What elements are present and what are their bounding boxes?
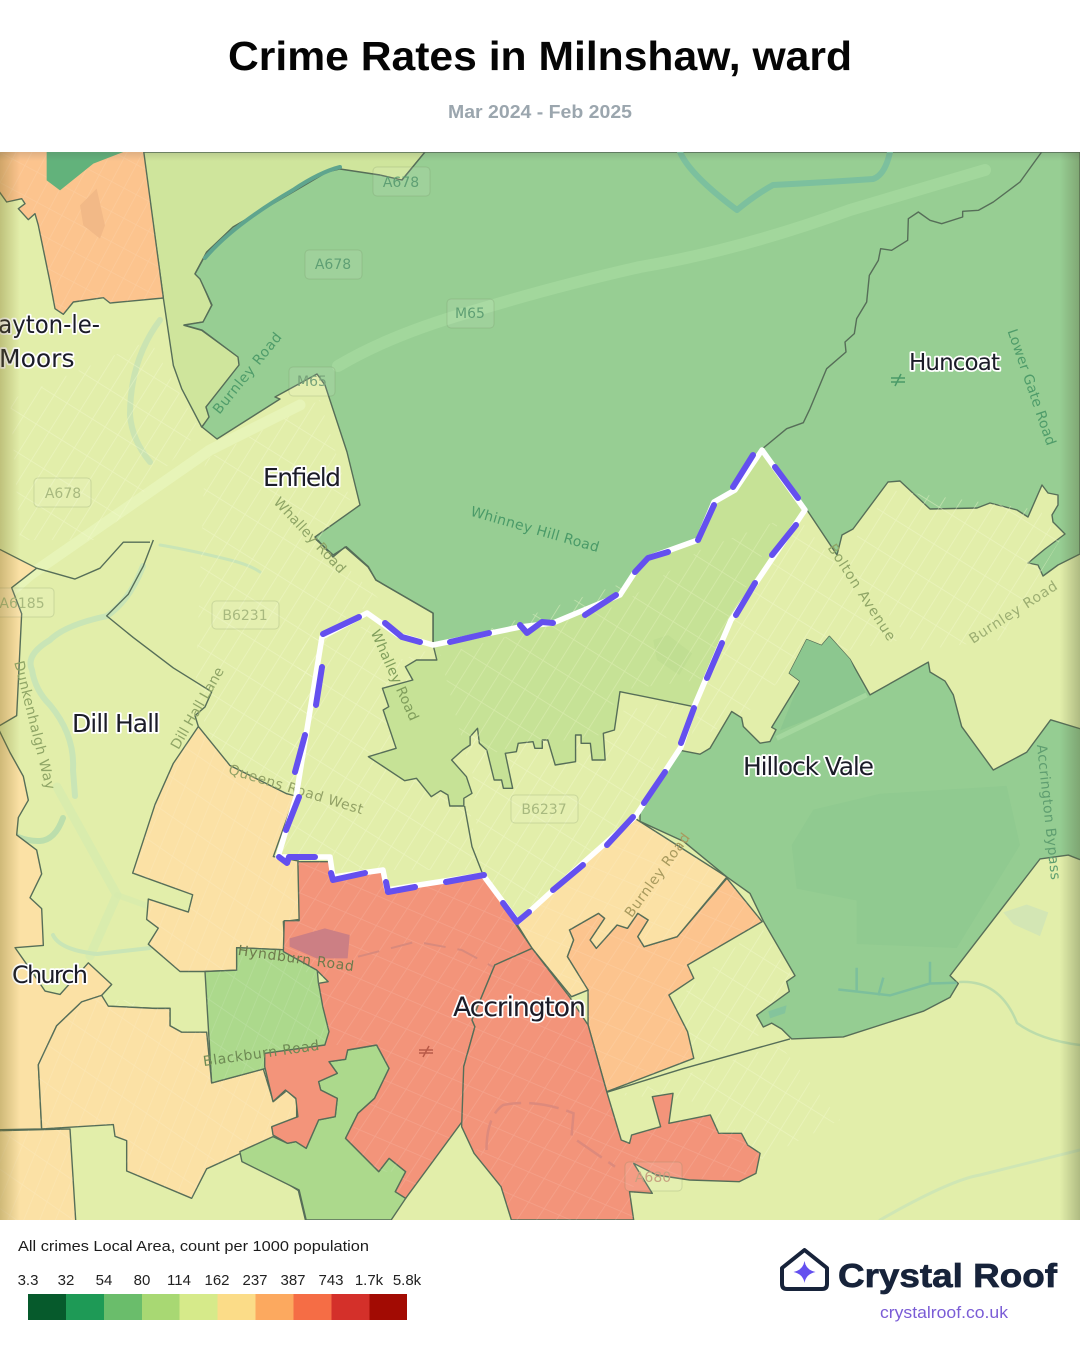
shield B6231 bbox=[212, 601, 279, 629]
map base area bbox=[0, 152, 1080, 1220]
region: orange east of Accrington bbox=[567, 878, 762, 1092]
street grid on ward inner area bbox=[440, 520, 780, 770]
place: Clayton-le-Moors bbox=[0, 310, 100, 373]
lime ward inner area bbox=[315, 450, 805, 875]
legend values: 162 bbox=[204, 1272, 230, 1289]
ward outline purple dashes bbox=[279, 455, 798, 922]
shield A680 bbox=[625, 1162, 682, 1191]
ward outline white bbox=[278, 450, 805, 922]
icon: house with star bbox=[782, 1250, 827, 1289]
boundary: between north green and Huncoat bbox=[763, 152, 1042, 448]
region: tan Burnley Road bbox=[518, 817, 727, 997]
road: Blackburn Road: Blackburn Road bbox=[202, 1038, 320, 1070]
region: Hillock Vale green bbox=[607, 636, 1080, 1092]
place labels bbox=[0, 310, 1000, 1023]
subtitle: date range: Mar 2024 - Feb 2025 bbox=[448, 101, 632, 122]
shield A678 bbox=[305, 250, 362, 279]
region: orange north-west bbox=[0, 149, 163, 314]
map edge shading bbox=[0, 152, 1080, 1220]
shield A678 north: A678 bbox=[383, 175, 419, 191]
legend values: 743 bbox=[318, 1272, 344, 1289]
place: Enfield: Enfield bbox=[263, 463, 341, 492]
shield A680: A680 bbox=[635, 1170, 671, 1186]
legend colour scale bbox=[28, 1294, 407, 1320]
legend values: 32 bbox=[58, 1272, 74, 1289]
motorway band M65 bbox=[0, 170, 1080, 956]
legend values: 114 bbox=[167, 1272, 191, 1289]
region: dark green corner bbox=[47, 152, 123, 190]
legend values: 1.7k bbox=[355, 1272, 384, 1289]
legend title: All crimes Local Area, count per 1000 population bbox=[18, 1238, 369, 1255]
website url: crystalroof.co.uk bbox=[880, 1304, 1009, 1322]
wordmark: Crystal Roof bbox=[838, 1257, 1058, 1294]
road names bbox=[10, 327, 1063, 1070]
legend values: 3.3 bbox=[18, 1272, 38, 1289]
shield M65 west bbox=[289, 367, 335, 396]
shield A6185: A6185 bbox=[0, 596, 45, 612]
road: Burnley Road south: Burnley Road bbox=[622, 830, 694, 921]
road shields bbox=[0, 167, 682, 1191]
choropleth map bbox=[0, 149, 1080, 1225]
road: Lower Gate Road: Lower Gate Road bbox=[1004, 327, 1058, 448]
icon: rail stations bbox=[419, 374, 905, 1057]
road: Accrington Bypass: Accrington Bypass bbox=[1033, 744, 1063, 881]
road: Whalley Road south: Whalley Road bbox=[367, 627, 421, 723]
road: Dill Hall Lane: Dill Hall Lane bbox=[168, 665, 228, 752]
region: red west Accrington bbox=[265, 862, 532, 1198]
shield A6185 bbox=[0, 588, 54, 617]
place: Dill Hall: Dill Hall bbox=[72, 709, 160, 738]
shield M65 bbox=[447, 299, 494, 328]
legend values: 237 bbox=[242, 1272, 268, 1289]
region: tan west, Dill Hall boundary bbox=[0, 540, 307, 1225]
road: Whalley Road north: Whalley Road bbox=[270, 494, 349, 577]
legend values: 387 bbox=[280, 1272, 306, 1289]
place: Clayton-le-Moors: Moors bbox=[0, 344, 74, 373]
logo: Crystal Roof bbox=[782, 1250, 1058, 1322]
region: light green north-west bbox=[143, 152, 425, 427]
shield M65: M65 bbox=[455, 306, 485, 322]
road: Bolton Avenue: Bolton Avenue bbox=[824, 541, 898, 644]
legend bbox=[18, 1238, 422, 1320]
road: Dunkenhalgh Way: Dunkenhalgh Way bbox=[10, 659, 58, 791]
place: Hillock Vale: Hillock Vale bbox=[743, 752, 874, 781]
road: Burnley Road east: Burnley Road bbox=[966, 578, 1061, 647]
title: Crime Rates in Milnshaw, ward bbox=[228, 33, 852, 79]
road: Burnley Road north: Burnley Road bbox=[210, 330, 285, 418]
road: Hyndburn Road: Hyndburn Road bbox=[237, 943, 355, 975]
place: Huncoat: Huncoat bbox=[909, 350, 1000, 376]
region: red east Accrington bbox=[462, 948, 760, 1220]
shield M65 west: M65 bbox=[297, 374, 327, 390]
region: green south of Accrington bbox=[240, 1045, 406, 1220]
region: large green north and Huncoat bbox=[184, 152, 1080, 643]
region: green block Blackburn Road bbox=[205, 948, 330, 1083]
shield B6237: B6237 bbox=[521, 802, 567, 818]
shield A678: A678 bbox=[315, 257, 351, 273]
legend values bbox=[18, 1272, 422, 1289]
ward boundary: Milnshaw bbox=[278, 450, 805, 922]
shield B6237 bbox=[511, 795, 578, 823]
shield A678 north bbox=[373, 167, 430, 196]
shield A678 west: A678 bbox=[45, 486, 81, 502]
place: Church: Church bbox=[12, 961, 88, 989]
street patterns on residential areas bbox=[10, 340, 1060, 1195]
legend values: 54 bbox=[96, 1272, 112, 1289]
place: Accrington: Accrington bbox=[453, 992, 586, 1023]
shield A678 west bbox=[34, 478, 91, 507]
road: Queens Road West: Queens Road West bbox=[226, 762, 365, 818]
road: Whinney Hill Road: Whinney Hill Road bbox=[469, 504, 601, 556]
shield B6231: B6231 bbox=[222, 608, 268, 624]
legend values: 80 bbox=[134, 1272, 150, 1289]
rivers bbox=[0, 152, 1080, 1220]
legend values: 5.8k bbox=[393, 1272, 422, 1289]
